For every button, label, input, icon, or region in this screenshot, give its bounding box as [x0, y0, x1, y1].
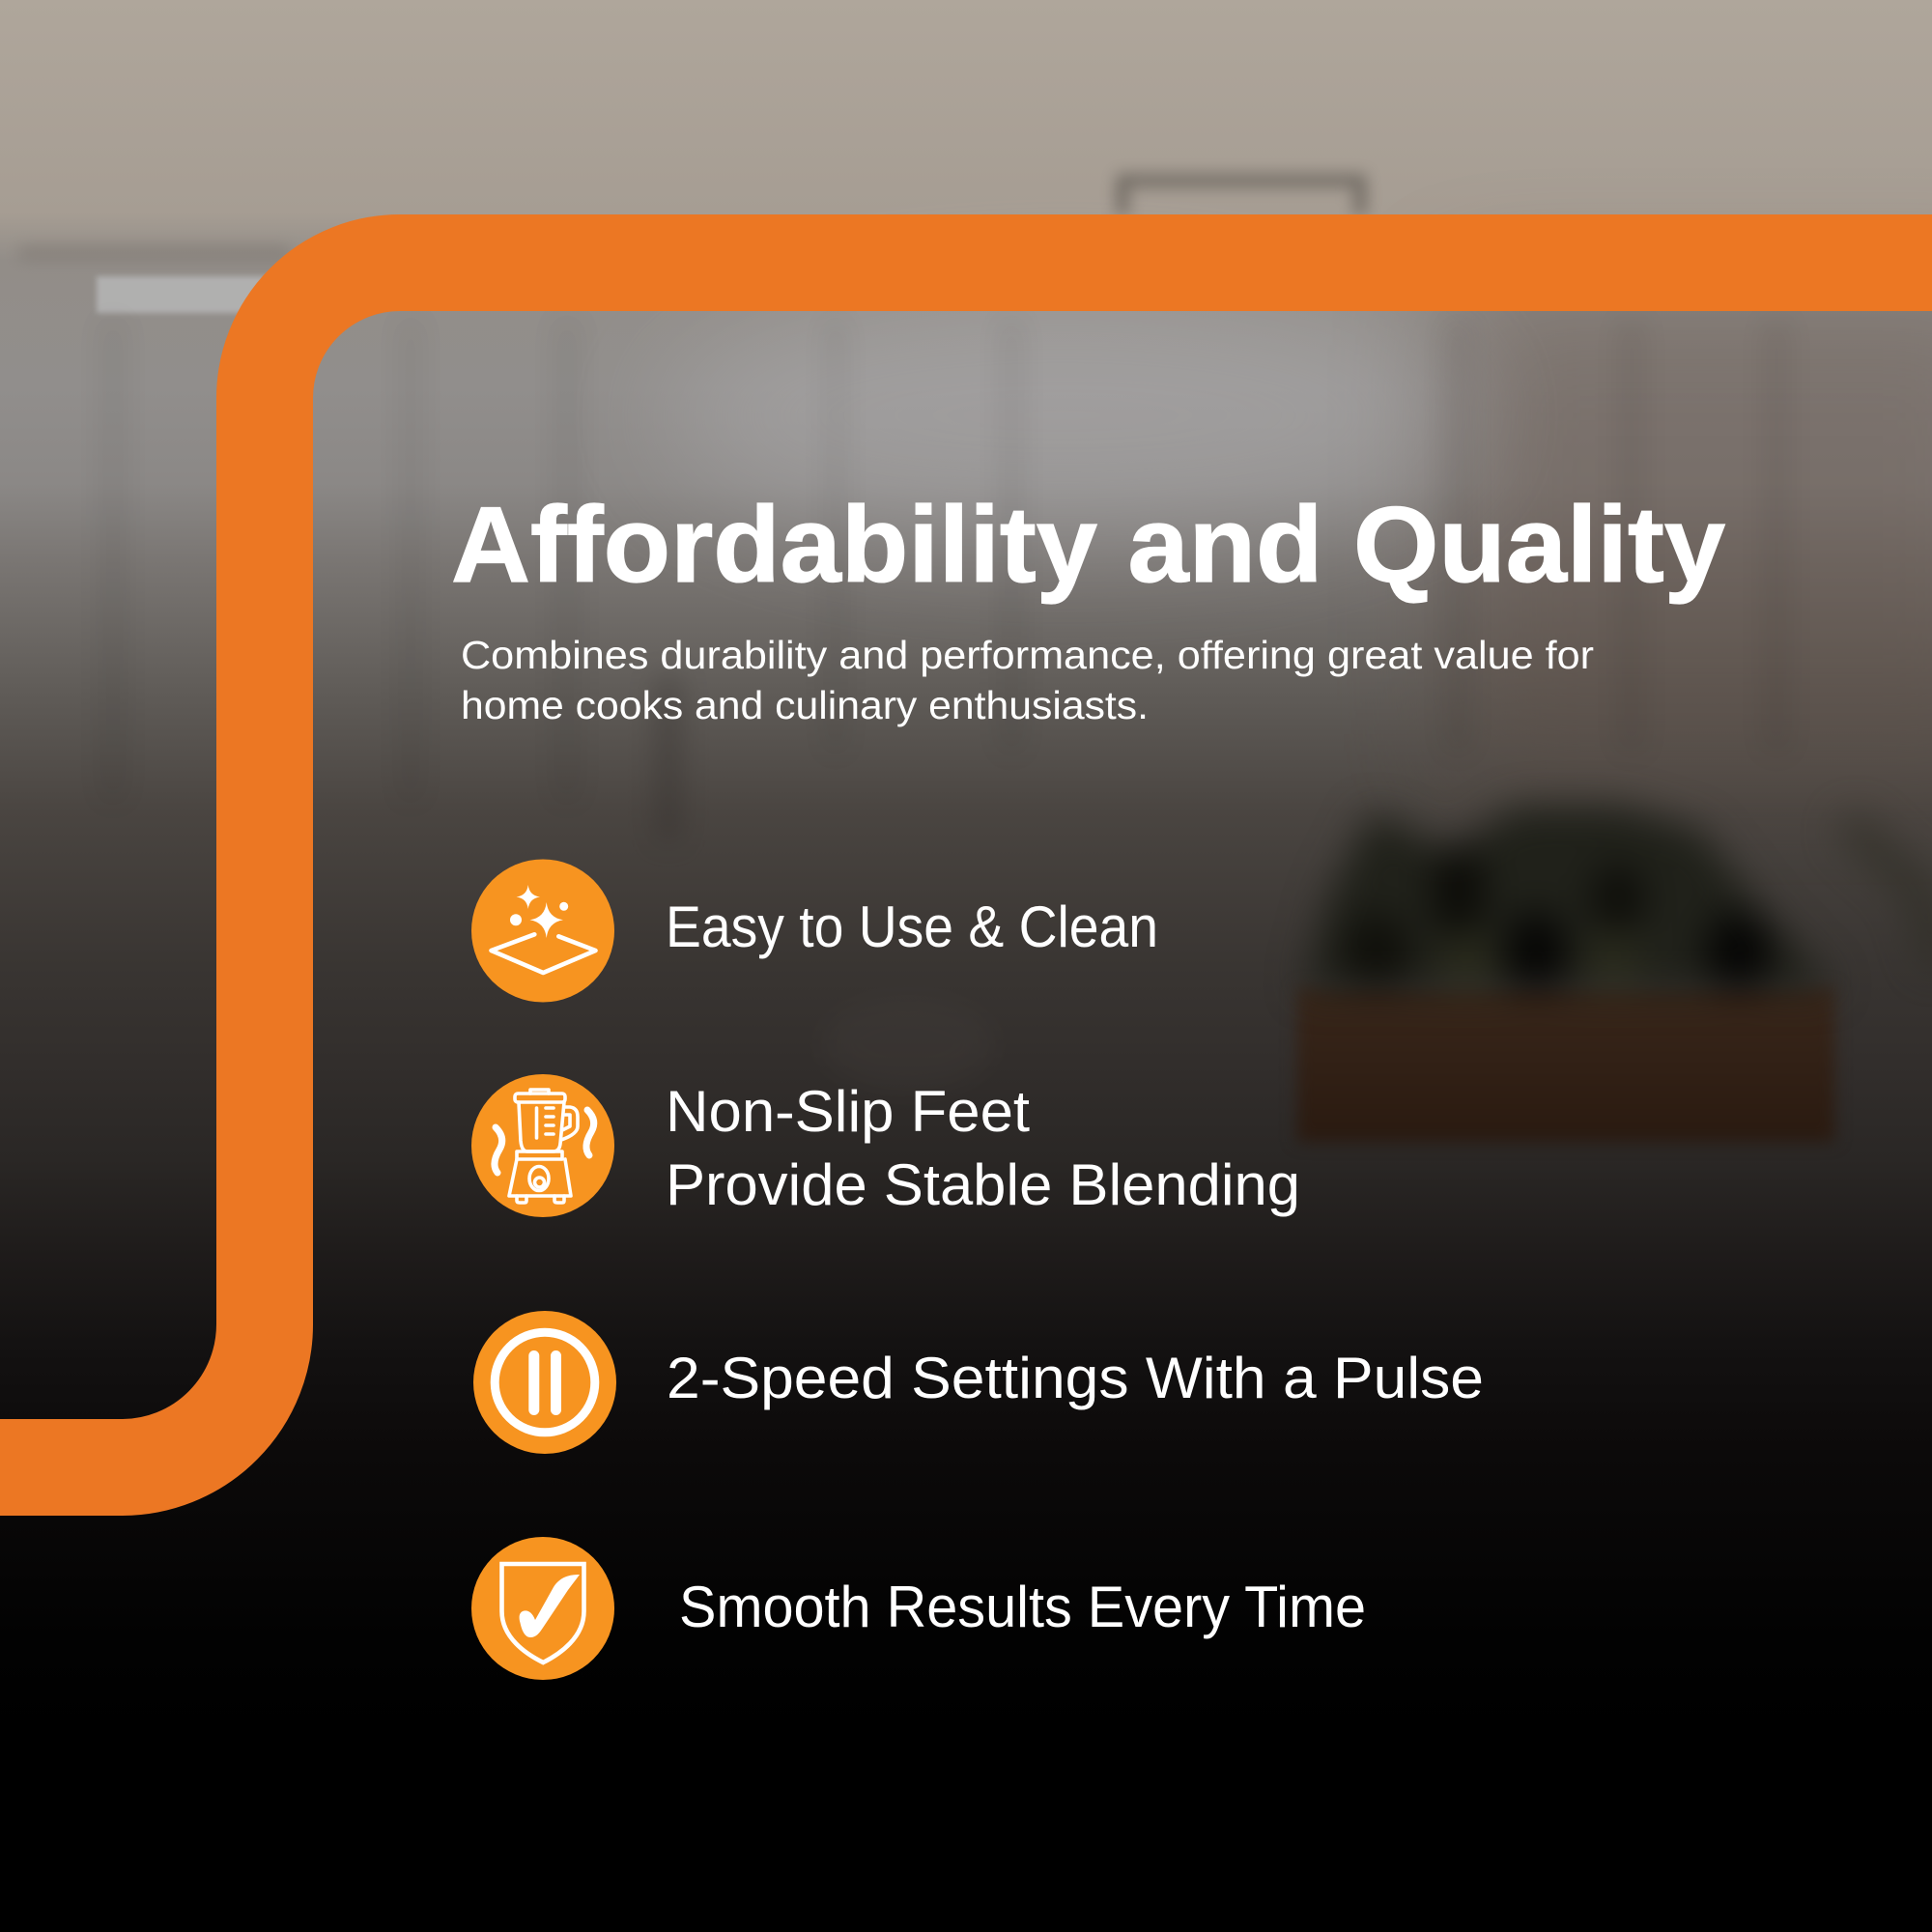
description text: [461, 633, 1594, 727]
label: non-slip feet provide stable blending: Non-Slip Feet: [666, 1079, 1030, 1144]
description text: Combines durability and performance, offering great value for: [461, 633, 1594, 677]
label: non-slip feet provide stable blending: [666, 1079, 1300, 1217]
label: speed settings: 2-Speed Settings With a Pulse: [667, 1346, 1484, 1410]
description text: home cooks and culinary enthusiasts.: [461, 683, 1149, 727]
feature: non-slip feet: [471, 1074, 1300, 1217]
icon: blender: [471, 1074, 614, 1217]
label: easy to use and clean: Easy to Use & Clean: [666, 895, 1158, 959]
feature: smooth results: [471, 1537, 1366, 1680]
title: Affordability and Quality: [451, 485, 1725, 605]
icon: sparkling surface: [471, 860, 614, 1003]
label: non-slip feet provide stable blending: Provide Stable Blending: [666, 1152, 1300, 1217]
feature: easy to use and clean: [471, 860, 1158, 1003]
icon: shield with check: [471, 1537, 614, 1680]
icon: pause ring: [473, 1311, 616, 1454]
feature: speed settings: [473, 1311, 1484, 1454]
orange frame: [0, 263, 1932, 1467]
label: smooth results: Smooth Results Every Time: [679, 1575, 1366, 1639]
